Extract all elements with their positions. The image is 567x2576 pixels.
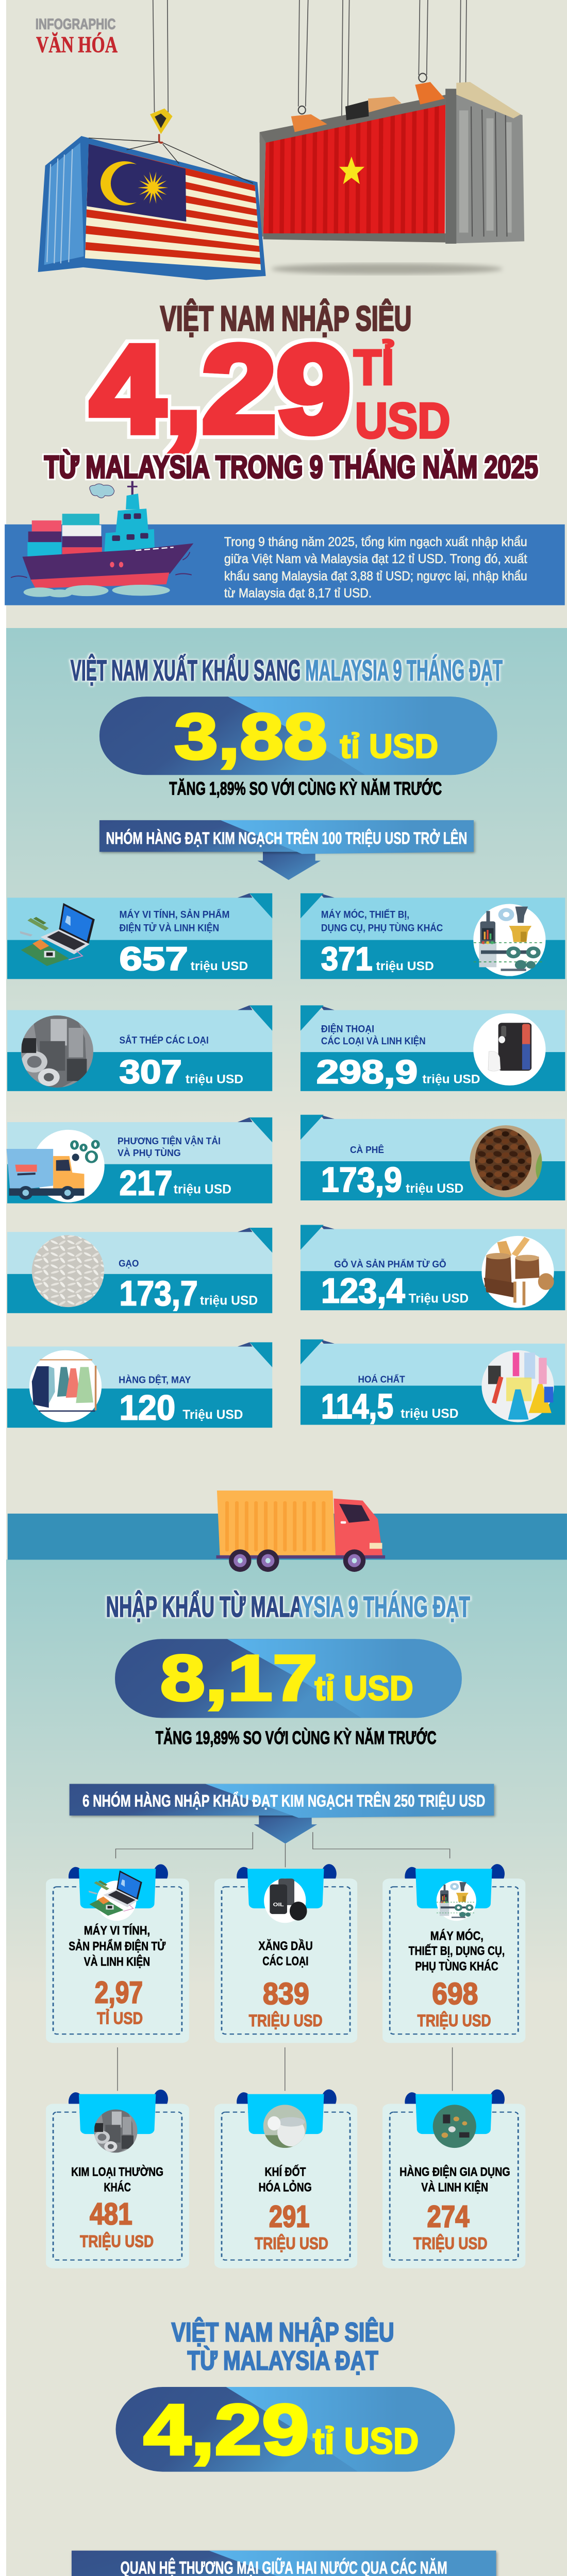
import card: liquefied gas: 291 (269, 2199, 309, 2233)
card: phones: CÁC LOẠI VÀ LINH KIỆN (321, 1035, 426, 1047)
card: phones: triệu USD (422, 1072, 480, 1086)
pill: exports value: tỉ USD (340, 727, 438, 765)
import card: machinery: PHỤ TÙNG KHÁC (415, 1959, 498, 1973)
panel: hero (5, 0, 565, 605)
card: machinery (301, 893, 565, 979)
card: computers: 657 (119, 941, 188, 977)
intro paragraph: giữa Việt Nam và Malaysia đạt 12 tỉ USD. Trong đó, xuất (224, 552, 527, 566)
card: vehicles: PHƯƠNG TIỆN VẬN TẢI (118, 1136, 221, 1146)
card: textiles (7, 1342, 272, 1428)
card: rice: 173,7 (119, 1275, 198, 1313)
import card: appliances: HÀNG ĐIỆN GIA DỤNG (399, 2164, 510, 2179)
import card: fuel: CÁC LOẠI (262, 1954, 308, 1968)
card: vehicles (7, 1117, 272, 1204)
card: wood (301, 1225, 565, 1310)
card: textiles: Triệu USD (182, 1408, 243, 1422)
card: wood: Triệu USD (409, 1292, 469, 1306)
card: wood: 123,4 (321, 1272, 405, 1310)
card: steel: 307 (119, 1054, 182, 1091)
banner with arrow (70, 1784, 494, 1843)
import card: machinery: THIẾT BỊ, DỤNG CỤ, (409, 1943, 505, 1958)
banner with arrow (99, 820, 474, 880)
import card: liquefied gas: KHÍ ĐỐT (264, 2164, 306, 2179)
card: machinery: MÁY MÓC, THIẾT BỊ, (321, 909, 409, 920)
band behind truck (8, 1514, 567, 1560)
illustration: crane cables (153, 0, 466, 116)
card: coffee: triệu USD (406, 1182, 463, 1196)
card: textiles: 120 (119, 1388, 175, 1427)
import card: machinery (382, 1864, 525, 2043)
connector lines (115, 1832, 453, 2091)
icon: truck (216, 1490, 385, 1572)
unit tỉ: TỈ (354, 340, 394, 395)
logo: INFOGRAPHIC (36, 16, 115, 32)
import card: fuel (214, 1864, 357, 2043)
card: machinery: 371 (321, 941, 373, 977)
card: vehicles: 217 (119, 1164, 173, 1202)
import card: liquefied gas: TRIỆU USD (255, 2233, 328, 2253)
import card: computers: SẢN PHẨM ĐIỆN TỬ (69, 1938, 166, 1953)
import card: fuel: TRIỆU USD (249, 2011, 323, 2030)
import card: appliances: 274 (427, 2199, 470, 2233)
card: chemicals: HOÁ CHẤT (358, 1374, 405, 1385)
pill: imports value: 8,17 (160, 1641, 318, 1714)
intro paragraph (224, 535, 527, 601)
card: coffee (301, 1115, 565, 1200)
card: coffee: 173,9 (321, 1161, 402, 1199)
heading: trade deficit: TỪ MALAYSIA ĐẠT (187, 2345, 378, 2376)
card: machinery: triệu USD (376, 959, 434, 973)
import card: appliances (382, 2089, 525, 2268)
card: steel (7, 1005, 272, 1091)
pill: exports value: 3,88 (174, 700, 327, 773)
import card: base metals: 481 (90, 2197, 132, 2231)
import card: computers (46, 1865, 189, 2043)
import card: liquefied gas (214, 2089, 357, 2268)
import card: base metals (46, 2090, 189, 2268)
import card: computers: MÁY VI TÍNH, (84, 1923, 150, 1938)
logo: VĂN HÓA (36, 32, 118, 57)
card: vehicles: triệu USD (174, 1182, 231, 1197)
card: chemicals: 114,5 (321, 1387, 393, 1426)
intro band (5, 524, 565, 605)
import card: base metals: TRIỆU USD (80, 2231, 154, 2251)
card: textiles: HÀNG DỆT, MAY (119, 1375, 191, 1385)
import card: fuel: 839 (263, 1976, 309, 2011)
big number 4,29: 4,29 (90, 319, 351, 458)
card: chemicals: triệu USD (401, 1406, 459, 1421)
card: vehicles: VÀ PHỤ TÙNG (118, 1147, 181, 1158)
card: rice: GẠO (119, 1258, 139, 1269)
card: phones: 298,9 (316, 1054, 418, 1091)
card: coffee: CÀ PHÊ (350, 1145, 384, 1155)
card: rice: triệu USD (200, 1294, 258, 1308)
import card: machinery: MÁY MÓC, (430, 1928, 483, 1943)
card: steel: triệu USD (186, 1072, 243, 1086)
import card: appliances: VÀ LINH KIỆN (421, 2180, 488, 2194)
import card: computers: VÀ LINH KIỆN (84, 1954, 150, 1969)
illustration: malaysia flag container (38, 108, 266, 280)
pill: imports value: tỉ USD (314, 1669, 413, 1708)
import card: base metals: KIM LOẠI THƯỜNG (71, 2164, 163, 2179)
import card: liquefied gas: HÓA LỎNG (259, 2179, 312, 2194)
panel: export cards lower rows (7, 1115, 565, 1428)
panel: exports heading (7, 654, 565, 1091)
card: computers (7, 893, 272, 979)
heading: trade deficit: VIỆT NAM NHẬP SIÊU (172, 2316, 394, 2347)
card: wood: GỖ VÀ SẢN PHẨM TỪ GỖ (334, 1259, 446, 1269)
card: chemicals (301, 1340, 565, 1426)
intro paragraph: khẩu sang Malaysia đạt 3,88 tỉ USD; ngược lại, nhập khẩu (224, 569, 527, 584)
illustration: vietnam flag container (260, 73, 524, 275)
intro paragraph: từ Malaysia đạt 8,17 tỉ USD. (224, 586, 372, 601)
panel: imports second row and trade deficit (46, 2089, 525, 2376)
pill: imports value (115, 1639, 462, 1718)
title: nhập siêu: VIỆT NAM NHẬP SIÊU (160, 299, 411, 338)
intro paragraph: Trong 9 tháng năm 2025, tổng kim ngạch xuất nhập khẩu (224, 535, 527, 549)
panel: trade deficit value and chart (71, 2387, 499, 2576)
card: phones (301, 1005, 565, 1091)
import card: computers: TỈ USD (97, 2009, 143, 2028)
heading: trade deficit (172, 2316, 394, 2376)
card: computers: ĐIỆN TỬ VÀ LINH KIỆN (119, 922, 219, 934)
import card: machinery: 698 (432, 1976, 478, 2011)
import card: appliances: TRIỆU USD (413, 2233, 488, 2253)
card: rice (7, 1228, 272, 1313)
import card: machinery: TRIỆU USD (418, 2011, 491, 2030)
logo (36, 16, 118, 57)
card: computers: triệu USD (191, 959, 248, 973)
panel: imports (8, 1490, 567, 2091)
banner with arrow (72, 2551, 496, 2576)
pill: deficit value (115, 2387, 455, 2472)
pill: deficit value: tỉ USD (313, 2420, 419, 2462)
icon: cargo ship (11, 481, 193, 597)
import card: computers: 2,97 (95, 1975, 143, 2009)
import card: fuel: OIL (273, 1902, 284, 1908)
card: steel: SẮT THÉP CÁC LOẠI (119, 1035, 209, 1046)
import card: base metals: KHÁC (104, 2180, 131, 2194)
card: machinery: DỤNG CỤ, PHỤ TÙNG KHÁC (321, 922, 443, 934)
card: phones: ĐIỆN THOẠI (321, 1023, 374, 1035)
pill: deficit value: 4,29 (143, 2389, 309, 2469)
pill: exports value (99, 697, 497, 775)
import card: fuel: XĂNG DẦU (259, 1939, 313, 1953)
unit USD: USD (355, 393, 450, 448)
card: computers: MÁY VI TÍNH, SẢN PHẨM (119, 909, 229, 920)
